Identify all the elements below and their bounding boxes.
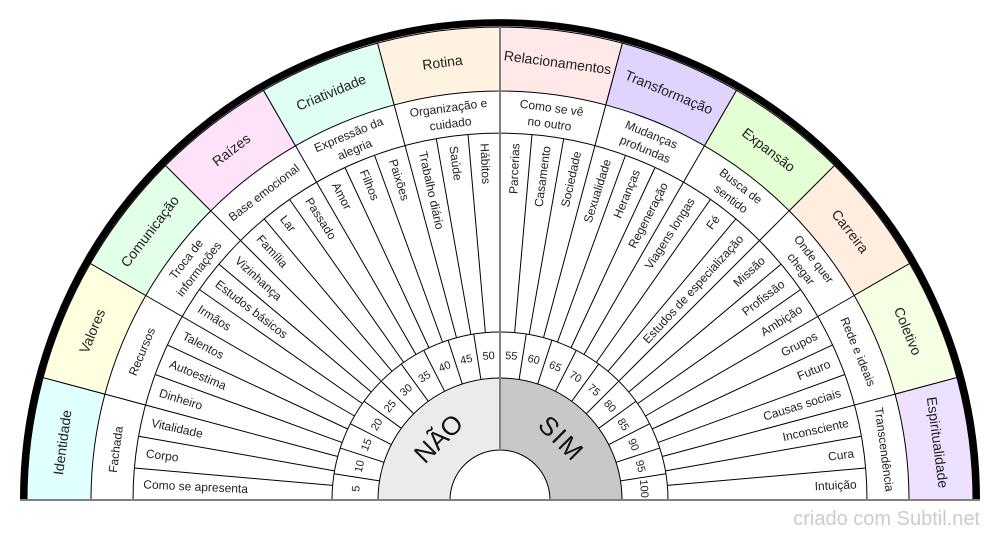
panel: Raízes: Passado [302, 195, 339, 242]
panel: Carreira: chegar [784, 250, 818, 288]
panel: Expansão: sentido [711, 182, 751, 216]
watermark: criado com Subtil.net [793, 508, 980, 530]
panel: Carreira [629, 163, 913, 416]
panel: Carreira: Ambição [758, 302, 805, 339]
panel: Comunicação: Vizinhança [232, 254, 285, 304]
percentage scale ring [332, 332, 668, 500]
panel: Valores: Recursos [126, 326, 158, 378]
panel: Identidade [23, 377, 338, 508]
panel: Coletivo: Rede e ideais [837, 315, 879, 388]
panel: Transformação: Transformação [623, 67, 715, 117]
panel: Relacionamentos: Casamento [532, 145, 554, 208]
panel: Valores: Dinheiro [157, 386, 205, 413]
panel: SIM half [500, 378, 622, 500]
percentage scale ring: 15 [359, 437, 375, 453]
percentage scale ring: 5 [350, 485, 363, 492]
panel: Criatividade: Paixões [386, 157, 412, 202]
panel: Carreira: Carreira [829, 206, 872, 256]
panel: Transformação: Sexualidade [581, 157, 614, 225]
percentage scale ring: 80 [601, 398, 618, 415]
panel: Carreira: Missão [730, 253, 768, 290]
panel: Rotina: Rotina [421, 52, 464, 73]
panel: Comunicação [87, 163, 381, 404]
panel: Rotina: cuidado [429, 114, 473, 133]
panel: Rotina: Hábitos [477, 143, 493, 184]
percentage scale ring: 40 [437, 359, 453, 375]
panel: Relacionamentos: Como se vê [519, 97, 585, 119]
panel: Espiritualidade: Cura [827, 446, 855, 464]
percentage scale ring: 25 [382, 398, 399, 415]
panel: Comunicação: Estudos básicos [213, 277, 290, 341]
panel: Expansão: Busca de [717, 165, 765, 207]
panel: Raízes: Família [254, 232, 291, 271]
panel: Comunicação: Irmãos [195, 302, 234, 334]
percentage scale ring: 85 [614, 416, 631, 433]
panel: Criatividade: Criatividade [294, 70, 368, 114]
panel: Identidade: Fachada [106, 425, 126, 473]
panel: Expansão: Fé [703, 212, 723, 232]
panel: Criatividade: Amor [329, 180, 355, 212]
panel: Carreira: Onde quer [791, 232, 837, 286]
percentage scale ring: 60 [526, 353, 541, 367]
panel: Criatividade: Expressão da [312, 114, 386, 155]
percentage scale ring: 70 [567, 369, 584, 386]
panel: Expansão [596, 87, 837, 381]
panel: Expansão: Viagens longas [642, 195, 698, 272]
percentage scale ring: 50 [482, 350, 495, 363]
panel: Espiritualidade [665, 377, 977, 508]
panel: Coletivo: Coletivo [891, 305, 925, 358]
percentage scale ring: 65 [547, 359, 563, 375]
panel: Coletivo: Futuro [795, 357, 833, 383]
panel: Identidade: Identidade [50, 409, 75, 476]
percentage scale ring: 100 [637, 479, 650, 498]
panel: Raízes: Base emocional [226, 161, 302, 224]
percentage scale ring: 55 [505, 350, 518, 363]
panel: Valores: Autoestima [167, 357, 229, 393]
panel: Espiritualidade: Inconsciente [781, 416, 850, 444]
panel: Espiritualidade: Espiritualidade [924, 396, 952, 489]
panel: Relacionamentos: Sociedade [558, 150, 584, 208]
panel: Identidade: Vitalidade [150, 416, 205, 441]
panel: Transformação: Regeneração [625, 180, 671, 250]
panel: Transformação: profundas [618, 133, 673, 166]
panel: Criatividade: Filhos [357, 167, 382, 202]
panel: Relacionamentos: no outro [527, 114, 573, 134]
panel: Rotina [377, 23, 508, 335]
percentage scale ring: 90 [625, 437, 641, 453]
panel: Identidade: Como se apresenta [143, 477, 249, 496]
panel: Relacionamentos: Parcerias [506, 143, 523, 194]
panel: Transformação [557, 39, 738, 355]
panel: Valores [39, 262, 355, 443]
panel: Relacionamentos [492, 23, 623, 338]
panel: Coletivo: Causas sociais [761, 386, 843, 424]
panel: Comunicação: informações [173, 239, 224, 299]
percentage scale ring: 30 [398, 382, 415, 399]
panel: Espiritualidade: Transcendência [872, 406, 897, 493]
percentage scale ring: 35 [416, 369, 433, 386]
panel: Comunicação: Troca de [166, 236, 206, 282]
percentage scale ring: 45 [459, 353, 474, 367]
panel: Criatividade: alegria [335, 136, 374, 163]
percentage scale ring: 20 [369, 416, 386, 433]
panel: Espiritualidade: Intuição [814, 477, 857, 493]
percentage scale ring: 10 [353, 459, 367, 474]
panel: Rotina: Saúde [446, 145, 465, 182]
panel: Relacionamentos: Relacionamentos [503, 47, 612, 77]
panel: NÃO half [378, 378, 500, 500]
panel: Transformação: Mudanças [623, 118, 680, 152]
panel: Coletivo: Grupos [779, 329, 820, 360]
panel: Carreira: Profissão [739, 277, 788, 319]
panel: Raízes: Raízes [209, 130, 253, 169]
panel: NÃO half: NÃO [408, 408, 469, 469]
panel: Rotina: Trabalho diário [416, 150, 447, 231]
panel: SIM half: SIM [532, 409, 591, 468]
percentage scale ring: 75 [585, 382, 602, 399]
panel: Raízes: Lar [277, 213, 299, 235]
panel: Expansão: Estudos de especialização [640, 232, 747, 346]
panel: Comunicação: Comunicação [117, 192, 182, 270]
panel: Coletivo [652, 262, 961, 457]
panel: Criatividade [262, 39, 457, 348]
panel: Valores: Valores [76, 307, 108, 356]
panel: Raízes [163, 87, 416, 371]
panel: Transformação: Heranças [610, 167, 643, 220]
panel: Expansão: Expansão [739, 124, 799, 175]
panel: Rotina: Organização e [409, 96, 488, 120]
panel: Valores: Talentos [180, 329, 226, 362]
percentage scale ring: 95 [633, 459, 647, 474]
panel: Identidade: Corpo [145, 446, 180, 465]
